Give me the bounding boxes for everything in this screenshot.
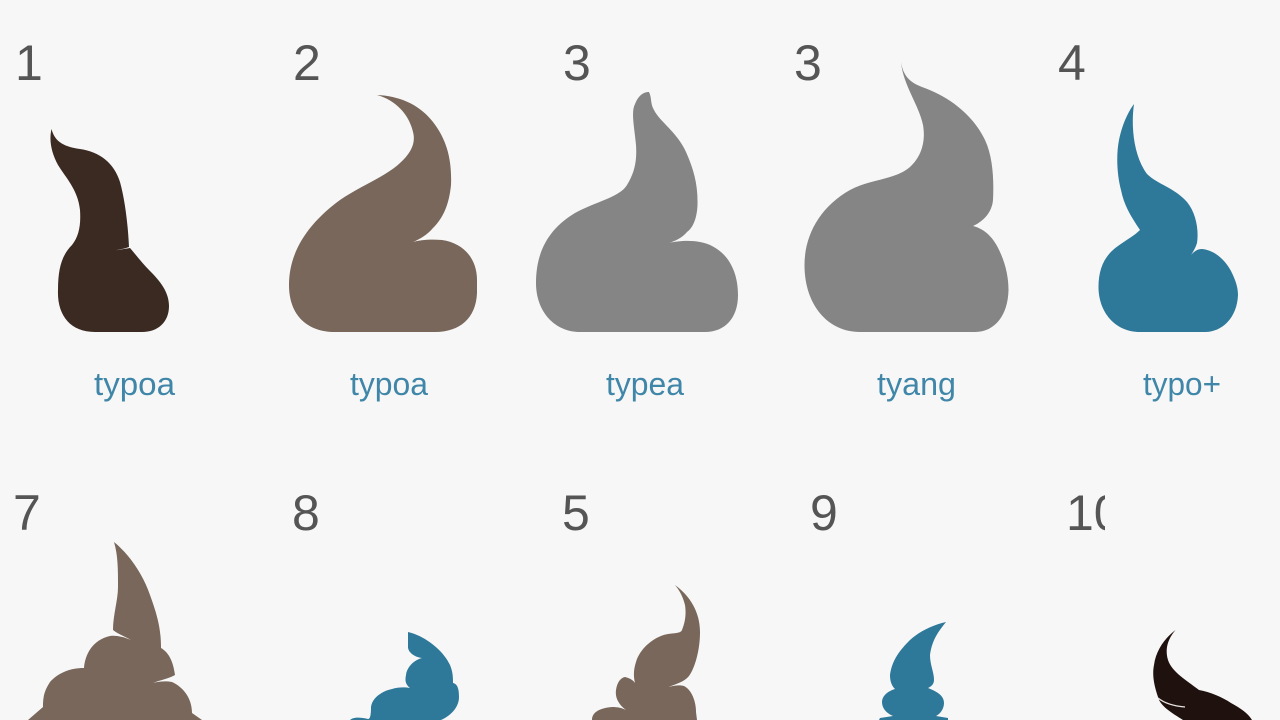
item 1 <box>15 35 175 402</box>
label: typoa <box>350 366 428 402</box>
icon: taupe swirl <box>289 95 477 332</box>
label: tyang <box>877 366 956 402</box>
icon: taupe layered mound <box>28 542 202 720</box>
number 3: 3 <box>563 35 591 91</box>
label: typoa <box>94 366 175 402</box>
icon: large grey swirl <box>804 62 1008 332</box>
item 10 <box>1066 485 1252 720</box>
number 3: 3 <box>794 35 822 91</box>
label: typea <box>606 366 684 402</box>
item 9 <box>810 485 948 720</box>
number 4: 4 <box>1058 35 1086 91</box>
number 10, clipped: 10 <box>1066 485 1122 541</box>
number 8: 8 <box>292 485 320 541</box>
item 5 <box>1058 35 1238 402</box>
item 2 <box>289 35 477 402</box>
icon: near-black swirl <box>1153 630 1252 720</box>
item 4 <box>794 35 1008 402</box>
icon: dark brown swirl <box>50 129 169 332</box>
number 5: 5 <box>562 485 590 541</box>
icon: taupe tall mound <box>592 585 700 720</box>
item 3 <box>536 35 738 402</box>
number 7: 7 <box>13 485 41 541</box>
item 8 <box>562 485 700 720</box>
number 2: 2 <box>293 35 321 91</box>
label: typo+ <box>1143 366 1221 402</box>
item 6 <box>13 485 202 720</box>
number 9: 9 <box>810 485 838 541</box>
icon: grey swirl <box>536 92 738 332</box>
icon: blue layered mound <box>350 632 459 720</box>
item 7 <box>292 485 459 720</box>
icon: blue swirl <box>1098 104 1238 332</box>
number 1: 1 <box>15 35 43 91</box>
icon: blue pointed mound <box>879 622 948 720</box>
